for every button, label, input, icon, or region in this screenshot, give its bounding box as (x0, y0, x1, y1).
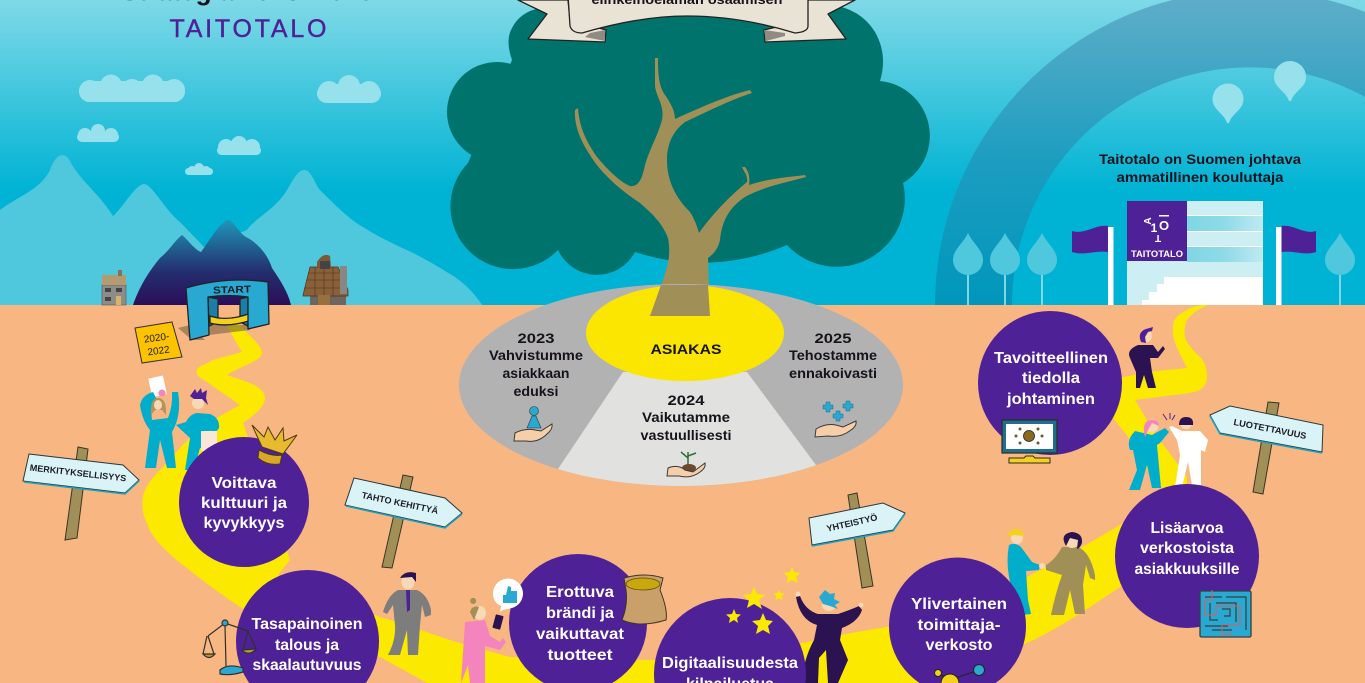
circle: tavoitteellinen tiedolla johtaminen: tiedolla (1022, 370, 1080, 387)
icon: star top (784, 567, 800, 583)
text: 2025: 2025 (814, 330, 852, 346)
Taitotalo building: TAITOTALO (1131, 249, 1183, 259)
circle: tasapainoinen talous ja skaalautuvuus (236, 570, 379, 683)
centre wedge 2024 (558, 372, 816, 486)
brown house (303, 255, 348, 305)
sign: merkityksellisyys: MERKITYKSELLISYYS (29, 463, 127, 483)
text: 2025: ennakoivasti (789, 365, 877, 381)
text: 2023: Vahvistumme (489, 347, 583, 363)
calendar 2020-2022 (135, 322, 182, 363)
figures: graduates (140, 376, 219, 470)
text: 2024: 2024 (668, 392, 705, 408)
dark mountain (133, 220, 291, 305)
circle: voittava kulttuuri ja kyvykkyys: Voittava (212, 475, 277, 492)
circle: lisäarvoa verkostoista asiakkuuksille: Lisäarvoa (1150, 520, 1224, 537)
asiakas ellipse: ASIAKAS (650, 341, 722, 357)
ground (0, 305, 1365, 683)
text: 2025: Tehostamme (789, 347, 877, 363)
asiakas ellipse (586, 285, 784, 381)
rainbow arc (935, 0, 1365, 306)
Taitotalo building: 1 (1151, 221, 1158, 235)
strategy plate (459, 284, 903, 500)
icon: network nodes (934, 664, 984, 683)
circle: ylivertainen toimittajaverkosto: toimittaja- (918, 617, 1000, 634)
circle: lisäarvoa verkostoista asiakkuuksille: verkostoista (1140, 540, 1234, 557)
sign: luotettavuus (1210, 402, 1323, 494)
START arch: START (213, 284, 251, 297)
circle: tavoitteellinen tiedolla johtaminen (978, 311, 1122, 455)
right heading (1099, 151, 1301, 185)
circle: voittava kulttuuri ja kyvykkyys (179, 437, 309, 567)
circle: erottuva brändi ja vaikuttavat tuotteet: vaikuttavat (536, 626, 625, 643)
sign: merkityksellisyys (23, 447, 139, 540)
figures: high five (1129, 413, 1208, 490)
sky (0, 0, 1365, 306)
icon: crown (252, 425, 297, 464)
sign: yhteistyö: YHTEISTYÖ (826, 512, 878, 534)
tree trunk (575, 58, 806, 316)
icon: money sack (622, 575, 666, 624)
figure: man reaching for stars (796, 590, 864, 683)
banner (518, 0, 855, 42)
circle: ylivertainen toimittajaverkosto: verkosto (926, 637, 993, 654)
text: 2024 (640, 392, 732, 443)
calendar 2020-2022: 2020- (143, 331, 170, 346)
icon: plant on hand (667, 452, 705, 477)
gray house (102, 270, 126, 305)
text: 2025 (789, 330, 877, 381)
sign: tahto kehittyä (345, 475, 462, 568)
trees (953, 233, 1355, 305)
Taitotalo building (1127, 201, 1263, 305)
icon: person on hand (514, 406, 552, 441)
text: 2023: eduksi (514, 383, 558, 399)
circle: ylivertainen toimittajaverkosto (889, 558, 1026, 683)
mountains (0, 155, 483, 306)
circle: tasapainoinen talous ja skaalautuvuus: Tasapainoinen (252, 616, 362, 633)
text: 2023 (489, 330, 583, 399)
figure: man in grey suit (383, 572, 431, 655)
circle: digitaalisuudesta kilpailuetua (654, 598, 806, 683)
circle: voittava kulttuuri ja kyvykkyys: kyvykkyys (204, 515, 285, 532)
icon: star small (774, 590, 784, 600)
yellow road (142, 305, 1208, 683)
clouds (77, 74, 381, 175)
circle: voittava kulttuuri ja kyvykkyys: kulttuuri ja (201, 495, 287, 512)
circle: tavoitteellinen tiedolla johtaminen: Tavoitteellinen (994, 350, 1108, 367)
sign: yhteistyö (809, 493, 905, 588)
icon: maze (1200, 590, 1251, 637)
circle: tavoitteellinen tiedolla johtaminen: johtaminen (1006, 391, 1095, 408)
circle: erottuva brändi ja vaikuttavat tuotteet: Erottuva (546, 584, 614, 601)
circle: digitaalisuudesta kilpailuetua: Digitaalisuudesta (662, 655, 798, 672)
circle: ylivertainen toimittajaverkosto: Ylivertainen (911, 596, 1007, 613)
Taitotalo building: O (1159, 218, 1169, 233)
circle: tasapainoinen talous ja skaalautuvuus: talous ja (275, 637, 339, 654)
strategy title: TAITOTALO (170, 15, 326, 43)
circle: erottuva brändi ja vaikuttavat tuotteet (509, 554, 647, 683)
stars over circle (726, 587, 773, 634)
text: 2024: vastuullisesti (640, 427, 732, 443)
Taitotalo building: T (1155, 232, 1161, 243)
figure: woman with phone (461, 579, 523, 683)
strategy title (120, 0, 374, 43)
right heading: Taitotalo on Suomen johtava (1099, 151, 1301, 167)
circle: tasapainoinen talous ja skaalautuvuus: skaalautuvuus (252, 657, 362, 674)
calendar 2020-2022: 2022 (147, 344, 171, 359)
START arch (178, 280, 269, 340)
circle: lisäarvoa verkostoista asiakkuuksille (1115, 484, 1259, 628)
text: 2023: asiakkaan (502, 365, 570, 381)
balloons (1212, 61, 1306, 123)
icon: plus signs on hand (815, 401, 856, 437)
icon: monitor (1002, 420, 1057, 463)
text: 2023: 2023 (518, 330, 555, 346)
speech bubble with thumbs up (493, 579, 523, 612)
icon: scales (203, 620, 256, 675)
tree canopy (447, 5, 930, 275)
sign: luotettavuus: LUOTETTAVUUS (1233, 417, 1307, 441)
text: 2024: Vaikutamme (642, 409, 730, 425)
figure: dark person pointing (1129, 327, 1165, 388)
sign: tahto kehittyä: TAHTO KEHITTYÄ (361, 490, 440, 516)
circle: erottuva brändi ja vaikuttavat tuotteet: tuotteet (548, 647, 613, 664)
flags (1072, 226, 1316, 305)
circle: erottuva brändi ja vaikuttavat tuotteet: brändi ja (546, 605, 614, 622)
circle: lisäarvoa verkostoista asiakkuuksille: asiakkuuksille (1134, 561, 1240, 578)
Taitotalo building: A (1143, 217, 1154, 225)
right heading: ammatillinen kouluttaja (1116, 169, 1284, 185)
figures: handshake (1007, 529, 1095, 615)
